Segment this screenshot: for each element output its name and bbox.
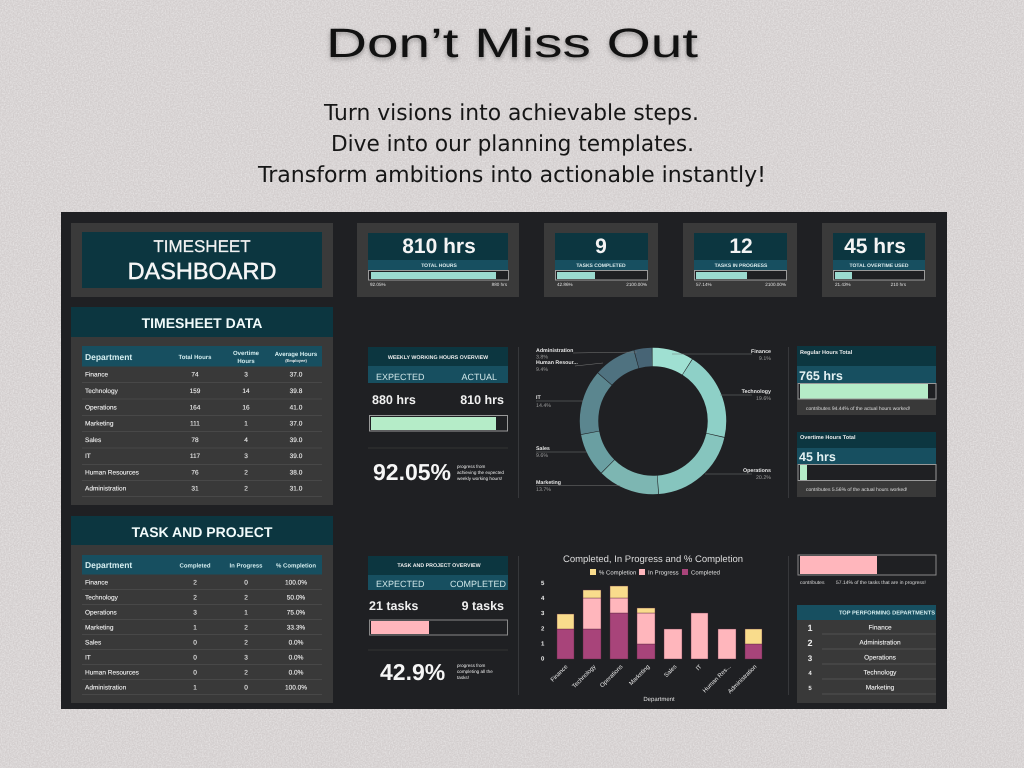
table: timesheet data: 39.0 (290, 437, 303, 444)
donut labels: Technology (742, 389, 771, 395)
panel: task and project (71, 516, 333, 703)
table: timesheet data: 37.0 (290, 420, 303, 428)
table: task and project: 3 (244, 654, 248, 662)
table: timesheet data: 39.0 (290, 453, 303, 460)
panel: overtime hours total: 45 hrs (799, 450, 836, 464)
table: timesheet data: 164 (190, 404, 201, 412)
dashboard (61, 212, 947, 709)
table: timesheet data: 3 (244, 372, 248, 378)
donut labels: 20.2% (756, 475, 771, 481)
table: timesheet data: Finance (85, 372, 109, 378)
donut labels (536, 348, 771, 493)
panel: top performing departments: 4 (808, 670, 812, 677)
KPI card: tasks in progress: 12 (729, 235, 753, 258)
chart legend (590, 569, 720, 576)
donut labels: 9.4% (536, 367, 548, 373)
table: task and project: 0 (244, 580, 248, 586)
donut labels: 9.1% (759, 356, 771, 362)
table: timesheet data: 74 (191, 372, 199, 378)
panel: regular hours total: contributes 94.44% of the actual hours worked! (806, 406, 910, 412)
donut labels: 14.4% (536, 403, 551, 409)
table: timesheet data: 38.0 (290, 470, 303, 476)
table: task and project: 0.0% (289, 654, 304, 662)
table: task and project: 2 (244, 670, 248, 676)
table: task and project: Technology (85, 594, 119, 602)
KPI card: tasks completed: 9 (595, 235, 607, 258)
table: task and project: In Progress (229, 562, 263, 570)
KPI card: total overtime used: 210 hrs (891, 282, 907, 287)
table: timesheet data: 2 (244, 470, 248, 476)
panel: task and project overview: EXPECTED (376, 579, 425, 589)
donut labels: 19.6% (756, 396, 771, 402)
panel: timesheet data: TIMESHEET DATA (142, 315, 262, 331)
table: timesheet data: 31 (191, 486, 199, 492)
table: task and project: Administration (85, 684, 127, 692)
y axis labels: 1 (541, 640, 545, 648)
panel: tasks in progress contribution: contributes (800, 580, 825, 586)
KPI card: total hours: TOTAL HOURS (421, 263, 457, 269)
table: task and project: 0 (193, 640, 197, 646)
table: task and project: 33.3% (287, 624, 305, 632)
panel: weekly working hours overview: 810 hrs (460, 393, 504, 407)
donut labels: 3.8% (536, 354, 548, 360)
table: task and project: Department (85, 560, 132, 570)
panel: dashboard title: DASHBOARD (128, 258, 276, 284)
table: timesheet data: Operations (85, 404, 118, 412)
panel: overtime hours total: Overtime Hours Total (800, 435, 856, 441)
table: timesheet data: 117 (190, 453, 201, 460)
donut labels: 13.7% (536, 487, 551, 493)
donut labels: Operations (743, 468, 771, 474)
panel: task and project overview (368, 556, 508, 685)
panel: top performing departments: 2 (807, 638, 813, 648)
KPI card: tasks in progress: 2100.00% (765, 282, 786, 287)
panel: task and project overview: progress from (457, 663, 486, 668)
panel: timesheet data (71, 307, 333, 505)
table: timesheet data: 31.0 (290, 486, 303, 492)
subtitle text: Transform ambitions into actionable instantly! (257, 163, 766, 188)
table: timesheet data: 16 (242, 404, 250, 412)
y axis labels: 0 (541, 656, 545, 662)
KPI card: total overtime used: 21.43% (835, 282, 851, 287)
table: timesheet data: 39.8 (290, 388, 303, 395)
y axis labels: 5 (541, 580, 545, 587)
table: task and project: Completed (179, 562, 211, 570)
subtitle text: Dive into our planning templates. (331, 132, 694, 157)
donut labels: Marketing (536, 480, 561, 486)
title: Don’t Miss Out (326, 20, 698, 66)
divider lines (518, 347, 788, 695)
table: task and project: 2 (193, 580, 197, 586)
KPI card: total hours (357, 223, 519, 297)
table: timesheet data: 1 (244, 420, 248, 428)
KPI card: total overtime used (822, 223, 936, 297)
table: task and project: % Completion (276, 562, 316, 570)
panel: regular hours total: 765 hrs (799, 369, 843, 383)
y axis labels: 4 (541, 595, 545, 602)
panel: task and project overview: TASK AND PROJECT OVERVIEW (397, 563, 481, 569)
x axis labels: Operations (599, 663, 624, 689)
panel: weekly working hours overview: progress from (457, 464, 486, 469)
donut chart: hours by department (536, 348, 771, 493)
table: timesheet data: Average Hours (275, 351, 318, 358)
table: timesheet data: 78 (191, 437, 199, 444)
KPI card: tasks in progress (683, 223, 797, 297)
x axis labels: Sales (663, 663, 678, 679)
panel: weekly working hours overview: achieving the expected (457, 470, 504, 475)
table: timesheet data (82, 346, 322, 496)
KPI card: tasks completed: TASKS COMPLETED (576, 263, 626, 269)
table: task and project: 0.0% (289, 670, 304, 676)
panel: weekly working hours overview: weekly working hours! (457, 476, 502, 481)
table: timesheet data: 14 (242, 388, 250, 395)
panel: task and project overview: 42.9% (380, 659, 445, 685)
panel: task and project: TASK AND PROJECT (132, 524, 273, 540)
stacked bar chart: completed, in progress and % completion: Department (643, 696, 675, 703)
table: task and project: 1 (244, 610, 248, 616)
chart legend: In Progress (648, 570, 679, 576)
chart legend: % Completion (599, 570, 636, 576)
table: task and project: 50.0% (287, 594, 305, 602)
table: timesheet data: 76 (191, 470, 199, 476)
donut labels: Sales (536, 446, 550, 452)
table: timesheet data: (Employee) (285, 358, 307, 363)
table: task and project: 1 (193, 684, 197, 692)
x axis labels: Human Res... (702, 663, 733, 694)
panel: overtime hours total: contributes 5.56% of the actual hours worked! (806, 487, 907, 493)
table: timesheet data: IT (85, 453, 91, 460)
panel: overtime hours total (797, 432, 936, 497)
panel: weekly working hours overview: 880 hrs (372, 393, 416, 407)
donut labels: Administration (536, 348, 573, 354)
table: timesheet data: 111 (190, 420, 200, 428)
table: timesheet data: 41.0 (290, 404, 303, 412)
table: task and project: 1 (193, 624, 197, 632)
table: timesheet data: 159 (190, 388, 201, 395)
table: task and project: 75.0% (287, 610, 305, 616)
table: task and project (82, 555, 322, 694)
table: timesheet data: Administration (85, 486, 127, 492)
table: task and project: 0 (193, 654, 197, 662)
KPI card: tasks completed: 2100.00% (626, 282, 647, 287)
donut labels: Finance (751, 349, 771, 355)
panel: top performing departments: Administration (859, 640, 901, 646)
table: task and project: Marketing (85, 624, 114, 632)
table: timesheet data: Total Hours (179, 354, 212, 361)
x axis labels: Marketing (628, 663, 651, 687)
table: timesheet data: Hours (237, 358, 255, 365)
stacked bar chart: completed, in progress and % completion (541, 554, 762, 703)
table: task and project: 0.0% (289, 640, 304, 646)
panel: top performing departments: Finance (868, 624, 892, 632)
panel: weekly working hours overview: ACTUAL (461, 372, 497, 382)
panel: top performing departments: 5 (808, 685, 812, 692)
x axis labels (549, 663, 758, 695)
donut labels: Human Resour... (536, 360, 578, 366)
table: timesheet data: 37.0 (290, 372, 303, 378)
x axis labels: IT (695, 663, 704, 672)
panel: weekly working hours overview: EXPECTED (376, 372, 425, 382)
panel: task and project overview: COMPLETED (450, 579, 506, 589)
panel: regular hours total: Regular Hours Total (800, 350, 853, 356)
KPI card: total hours: 880 hrs (492, 282, 508, 287)
table: timesheet data: Overtime (233, 350, 260, 357)
donut labels: 9.6% (536, 453, 548, 459)
panel: regular hours total (797, 346, 936, 415)
table: task and project: Human Resources (85, 670, 140, 676)
panel: weekly working hours overview (368, 347, 508, 485)
panel: task and project overview: 21 tasks (369, 599, 418, 613)
table: task and project: IT (85, 654, 91, 662)
panel: top performing departments: TOP PERFORMING DEPARTMENTS (839, 610, 935, 616)
x axis labels: Technology (571, 663, 597, 690)
panel: dashboard title: TIMESHEET (153, 237, 251, 256)
y axis labels: 2 (541, 626, 545, 632)
panel: top performing departments (797, 605, 936, 703)
table: task and project: Operations (85, 610, 118, 616)
table: task and project: Sales (85, 640, 102, 646)
table: timesheet data: Human Resources (85, 470, 140, 476)
bars (557, 586, 762, 659)
table: timesheet data: 3 (244, 453, 248, 460)
KPI card: total overtime used: TOTAL OVERTIME USED (850, 263, 909, 269)
table: task and project: 100.0% (285, 684, 307, 692)
KPI card: total hours: 92.05% (370, 282, 386, 287)
KPI card: tasks completed: 42.86% (557, 282, 573, 287)
panel: top performing departments: 3 (808, 654, 813, 663)
KPI card: tasks completed (544, 223, 658, 297)
panel: tasks in progress contribution (798, 555, 936, 586)
panel: top performing departments: 1 (807, 623, 813, 633)
x axis labels: Finance (549, 663, 570, 684)
panel: dashboard title (71, 223, 333, 297)
stacked bar chart: completed, in progress and % completion: Completed, In Progress and % Completion (563, 554, 743, 565)
table: task and project: 0 (244, 684, 248, 692)
table: task and project: 2 (244, 594, 248, 602)
panel: top performing departments: Operations (864, 654, 897, 662)
panel: weekly working hours overview: 92.05% (373, 459, 451, 485)
x axis labels: Administration (727, 663, 758, 695)
table: timesheet data: Technology (85, 388, 119, 395)
table: task and project: 2 (244, 640, 248, 646)
subtitle text (257, 101, 766, 188)
KPI card: total hours: 810 hrs (402, 235, 476, 258)
panel: task and project overview: completing all the (457, 669, 493, 674)
panel: tasks in progress contribution: 57.14% of the tasks that are in progress! (836, 580, 926, 586)
table: timesheet data: 2 (244, 486, 248, 492)
panel: task and project overview: tasks! (457, 675, 469, 680)
table: task and project: 3 (193, 610, 197, 616)
table: timesheet data: Sales (85, 437, 102, 444)
panel: top performing departments: Technology (864, 670, 897, 676)
panel: task and project overview: 9 tasks (462, 599, 504, 613)
table: timesheet data: Marketing (85, 420, 114, 428)
chart legend: Completed (691, 570, 720, 576)
KPI card: tasks in progress: 57.14% (696, 282, 712, 287)
table: task and project: 100.0% (285, 580, 307, 586)
table: task and project: Finance (85, 580, 109, 586)
panel: weekly working hours overview: WEEKLY WORKING HOURS OVERVIEW (388, 355, 488, 361)
panel: top performing departments: Marketing (866, 684, 895, 692)
table: timesheet data: 4 (244, 437, 248, 444)
table: timesheet data: Department (85, 352, 132, 362)
donut labels: IT (536, 395, 541, 401)
y axis labels (541, 580, 545, 662)
table: task and project: 2 (244, 624, 248, 632)
KPI card: tasks in progress: TASKS IN PROGRESS (715, 263, 768, 269)
subtitle text: Turn visions into achievable steps. (323, 101, 699, 126)
table: task and project: 0 (193, 670, 197, 676)
KPI card: total overtime used: 45 hrs (844, 235, 906, 258)
y axis labels: 3 (541, 610, 545, 617)
table: task and project: 2 (193, 594, 197, 602)
